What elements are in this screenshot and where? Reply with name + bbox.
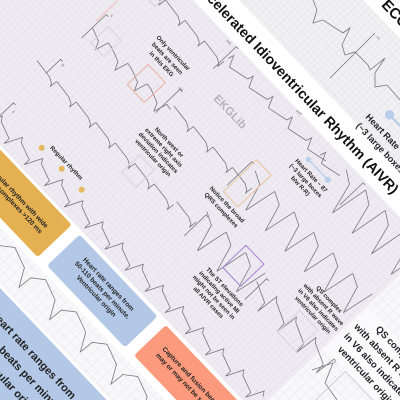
annotation: ST elevation: indicating active MI xyxy=(197,271,240,315)
annotation: ST elevation: might not be seen in xyxy=(191,275,236,321)
ECG trace: row B xyxy=(82,12,375,317)
lead labels: aVL xyxy=(177,86,185,93)
annotation: ST elevation xyxy=(185,264,247,327)
card: heart rate ranges: 50-110 beats per minute. xyxy=(73,260,131,321)
annotation: heart rate small: (~3 large boxes xyxy=(288,163,323,200)
card: regular rhythm with wide QRS xyxy=(0,27,72,257)
annotation: heart rate small: Heart Rate ~ 87 xyxy=(293,158,328,194)
annotation: heart rate small: b/w R-R) xyxy=(289,176,310,197)
highlight box: lavender left xyxy=(91,27,121,57)
annotation: ST elevation: The ST elevations xyxy=(204,267,244,309)
ECG trace: upper panel V1 xyxy=(313,0,400,100)
panel: upper ECG strip xyxy=(125,0,400,315)
card: heart rate ranges: Heart rate ranges from xyxy=(81,257,135,313)
annotation: axis deviation xyxy=(131,121,190,181)
annotation: axis deviation: ventricular origin xyxy=(133,139,172,179)
highlight box: QS complex xyxy=(277,311,318,351)
ECG trace: row C xyxy=(26,48,343,378)
lead labels: aVF xyxy=(295,109,303,116)
panel: lower right detail grid xyxy=(255,247,400,400)
lead labels: V1 xyxy=(375,35,381,41)
watermark: EKGLib: EKGLib xyxy=(211,93,249,132)
ECG trace: row D xyxy=(0,85,279,400)
icon: R-R interval large xyxy=(384,109,400,154)
annotation: QS complex small: QS complex xyxy=(314,285,343,315)
annotation: only ventricular beats: beats are seen xyxy=(150,42,183,77)
card: heart rate ranges: Ventricular origin xyxy=(75,274,117,319)
annotation: ST elevation: all AIVR cases xyxy=(191,286,224,320)
annotation: only ventricular beats: Only ventricular xyxy=(155,35,191,73)
highlight box: top lavender xyxy=(141,0,176,7)
calibration mark: upper panel xyxy=(330,33,375,78)
highlight box: top red edge xyxy=(96,1,118,21)
icon: regular rhythm dots xyxy=(37,144,86,194)
annotation: only ventricular beats: in this EKG xyxy=(148,51,174,79)
annotation: broad QRS: Notice the broad xyxy=(208,186,245,225)
lead labels: II xyxy=(109,14,114,18)
lead labels: III xyxy=(60,63,65,68)
annotation: regular rhythm: Regular rhythm xyxy=(48,145,83,182)
highlight box: axis deviation xyxy=(121,155,154,187)
annotation: QS complex small: with absent R wave xyxy=(301,282,345,328)
ECG trace: enlarged lower right xyxy=(312,363,337,400)
ECG trace: lower rhythm strip xyxy=(0,218,232,400)
lead labels: II xyxy=(11,110,16,114)
annotation: only ventricular beats xyxy=(143,35,191,84)
annotation: QS complex small xyxy=(290,277,350,338)
highlight box: broad QRS xyxy=(223,160,271,207)
annotation: axis deviation: extreme right axis xyxy=(143,128,183,169)
card: enlarged heart rate ranges xyxy=(0,209,153,400)
highlight box: ST elevation xyxy=(223,245,264,286)
highlight box: only ventricular beats xyxy=(127,64,165,102)
card: heart rate ranges xyxy=(47,235,158,347)
annotation: broad QRS: QRS complexes xyxy=(203,192,239,230)
panel: enlarged QS complex note xyxy=(326,308,400,400)
panel: lower rhythm strip xyxy=(0,35,301,400)
highlight box: enlarged QS xyxy=(316,372,373,400)
lead labels: aVL xyxy=(225,39,233,46)
ECG trace: row A xyxy=(127,0,400,300)
annotation: QS complex small: in V6 also indicates xyxy=(296,288,339,333)
annotation: QS complex small: ventricular origin xyxy=(293,296,331,336)
card: capture and fusion beats xyxy=(134,325,249,400)
text: enlarged QS complex xyxy=(331,311,400,400)
icon: R-R interval small xyxy=(305,156,331,183)
annotation: heart rate small xyxy=(282,158,328,205)
annotation: axis deviation: North west or xyxy=(153,127,184,160)
annotation: axis deviation: deviation indicates xyxy=(137,132,179,175)
lead labels xyxy=(11,14,381,116)
